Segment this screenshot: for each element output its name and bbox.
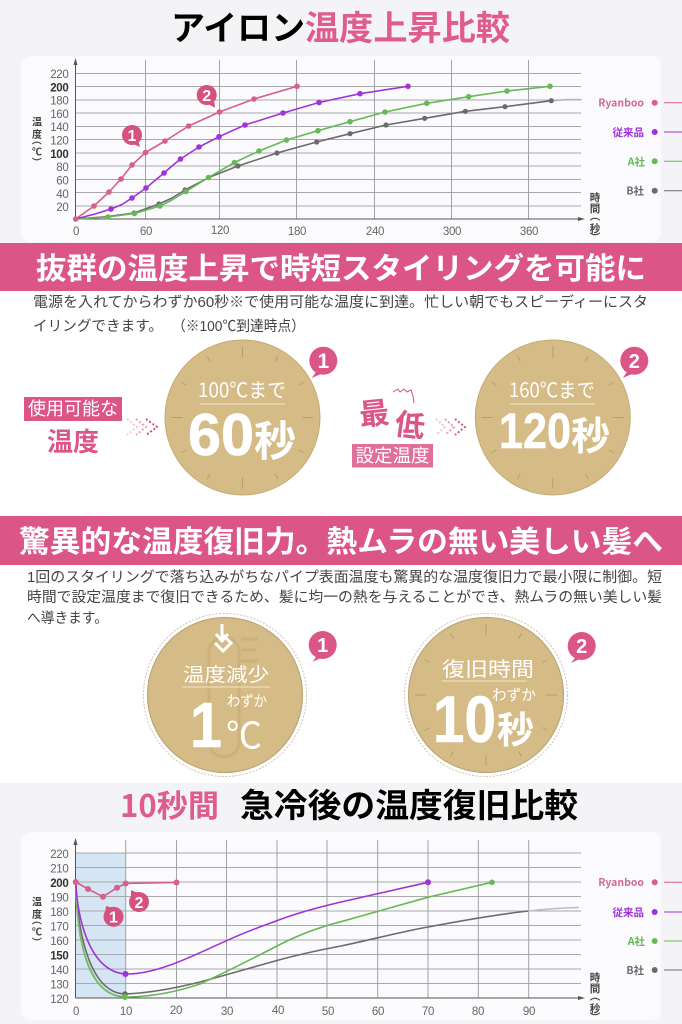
x axis title: 時 [590,191,601,204]
y axis labels: 40 [56,189,68,201]
curve: A company [76,880,495,1000]
clock: 160 degrees in 120 seconds: 秒 [571,406,610,462]
panel: recovery chart [21,832,682,1022]
line: A company [76,84,553,220]
x axis labels: 10 [120,1006,132,1018]
title: iron temperature rise comparison: 温度上昇比較 [305,1,510,50]
clock: 100 degrees in 60 seconds: 60 [188,402,254,468]
y axis labels: 200 [50,878,68,890]
arrow: dotted chevrons two [436,419,465,435]
y axis labels: 170 [50,922,68,934]
x axis labels: 90 [523,1006,535,1018]
spark lines [393,389,414,403]
x axis labels: 60 [140,226,152,238]
badge one: 1 [317,350,329,373]
label: usable temperature [24,395,122,459]
x axis labels: 80 [472,1006,484,1018]
label: usable temperature: 使用可能な [28,395,118,421]
y axis title: 温 [32,896,42,908]
chart grid [74,838,585,1000]
badge three: 1 [317,635,328,657]
chart grid [74,58,585,221]
text block: intro one: イリングできます。 [33,318,163,335]
y axis labels: 190 [50,892,68,904]
legend: Ryanboo [598,875,644,890]
x axis labels: 120 [211,225,229,237]
line: conventional product [76,84,411,219]
y axis title: （ [30,135,42,145]
curve: conventional product [76,879,431,977]
label: lowest set temperature: 最 [357,388,391,435]
banner: outstanding temperature rise: 抜群の温度上昇で時短スタイリングを可能に [36,244,646,288]
thermometer watermark [209,637,258,757]
marker 1: 1 [128,128,137,145]
y axis labels: 120 [50,136,68,148]
highlighted ten seconds [76,853,126,998]
clock: 160 degrees in 120 seconds [475,340,630,495]
label: lowest set temperature: 設定温度 [356,442,430,468]
y axis labels: 160 [50,109,68,121]
x axis title: （ [588,211,601,222]
marker 1: 1 [109,910,118,926]
dial: recovery time 10 seconds [404,614,568,776]
y axis title [30,896,42,947]
y axis title: 温 [32,116,42,128]
line: Ryanboo [73,84,300,222]
y axis labels: 220 [50,69,68,81]
marker 2 [129,890,149,912]
marker 1 [122,125,142,147]
marker 1 [104,906,124,927]
legend: Ryanboo [598,96,644,110]
clock: 100 degrees in 60 seconds: 100℃まで [198,374,286,403]
x axis title: （ [588,991,601,1002]
y axis labels: 180 [50,907,68,919]
y axis labels: 210 [50,864,68,876]
y axis labels: 220 [50,849,68,861]
y axis labels [50,69,68,214]
arrow: dotted chevrons one [127,419,157,435]
badge three [309,631,337,662]
dial: temperature drop 1 degree [1,0,306,776]
x axis title [588,191,601,242]
text block: intro one [33,293,648,335]
legend: A社 [627,154,645,169]
x axis title: 秒 [590,222,601,235]
y axis labels: 80 [56,162,68,174]
x axis labels [73,1005,535,1018]
label: lowest set temperature: 低 [392,399,428,447]
y axis labels: 60 [56,176,68,188]
x axis labels: 360 [520,226,538,238]
title: iron temperature rise comparison [171,1,510,50]
dial: recovery time 10 seconds: 秒 [497,700,534,754]
marker 2: 2 [135,895,144,912]
x axis labels: 60 [372,1006,384,1018]
y axis labels: 130 [50,980,68,992]
legend: B社 [626,184,644,198]
text block: intro two: 1回のスタイリングで落ち込みがちなパイプ表面温度も驚異的な温度復旧力で最小限に制御。短 [27,569,662,586]
badge one [309,347,337,378]
x axis labels: 50 [322,1006,334,1018]
dial: recovery time 10 seconds: 復旧時間 [442,653,534,682]
y axis title [30,116,42,167]
y axis title: ） [30,157,42,167]
marker 2: 2 [202,88,211,105]
text block: intro two: 時間で設定温度まで復旧できるため、髪に均一の熱を与えることができ、熱ムラの無い美しい髪 [27,589,662,606]
down arrow icon [215,624,231,651]
x axis labels: 180 [288,226,306,238]
text block: intro two [27,569,662,627]
title: iron temperature rise comparison: アイロン [171,1,305,50]
x axis labels [73,225,538,238]
y axis labels: 140 [50,122,68,134]
x axis labels: 240 [366,226,384,238]
y axis labels: 140 [50,965,68,977]
legend: 従来品 [612,905,644,920]
y axis title: ℃ [32,928,42,938]
y axis title: ） [30,937,42,947]
badge two: 2 [629,351,640,373]
clock: 160 degrees in 120 seconds: 120 [499,403,571,459]
x axis labels: 20 [170,1005,182,1017]
banner: recovery power: 驚異的な温度復旧力。熱ムラの無い美しい髪へ [19,517,663,561]
x axis labels: 70 [422,1006,434,1018]
legend: B社 [626,963,644,978]
y axis title: 度 [32,908,42,921]
x axis title: 時 [590,971,601,984]
y axis title: ℃ [32,148,42,158]
x axis title: ） [588,232,601,242]
x axis title [588,971,601,1022]
dial: recovery time 10 seconds: 10 [433,682,496,756]
text block: intro one: （※100℃到達時点） [172,318,305,335]
dial: temperature drop 1 degree: ℃ [226,707,262,759]
panel: temperature rise chart [21,56,682,242]
marker 2 [197,85,217,108]
legend [598,875,682,978]
x axis title: 間 [590,983,600,995]
legend [598,96,682,198]
title: recovery comparison: 10秒間 [120,781,219,826]
clock: 160 degrees in 120 seconds: 160℃まで [509,374,595,403]
label: lowest set temperature [352,388,433,468]
title: recovery comparison: 急冷後の温度復旧比較 [240,779,578,827]
y axis title: 度 [32,128,42,141]
x axis title: 秒 [590,1002,601,1015]
x axis labels: 40 [272,1005,284,1017]
x axis labels: 300 [443,226,461,238]
y axis labels: 120 [50,994,68,1006]
y axis labels: 180 [50,96,68,108]
x axis title: ） [588,1012,601,1022]
x axis labels: 0 [73,1006,79,1018]
clock: 100 degrees in 60 seconds [165,340,320,495]
x axis labels: 0 [73,226,79,238]
curve: Ryanboo [73,879,180,900]
dial: temperature drop 1 degree: わずか [227,690,267,711]
line: B company [76,98,581,219]
label: usable temperature: 温度 [47,422,99,459]
y axis labels: 200 [50,82,68,94]
y axis labels: 100 [50,149,68,161]
y axis labels [50,849,68,1006]
text block: intro one: 電源を入れてからわずか60秒※で使用可能な温度に到達。忙しい朝でもスピーディーにスタ [33,293,648,311]
y axis labels: 150 [50,950,68,962]
curve: B company [76,882,578,997]
badge four [568,632,596,663]
y axis labels: 20 [56,202,68,214]
legend: A社 [627,934,645,949]
badge four: 2 [576,636,587,658]
clock: 100 degrees in 60 seconds: 秒 [254,408,296,469]
badge two [620,347,648,378]
x axis labels: 30 [221,1006,233,1018]
x axis title: 間 [590,203,600,215]
dial: recovery time 10 seconds: わずか [492,684,536,705]
dial: temperature drop 1 degree: 1 [190,689,222,761]
legend: 従来品 [612,125,644,140]
text block: intro two: へ導きます。 [27,610,108,627]
y axis labels: 160 [50,936,68,948]
dial: temperature drop 1 degree: 温度減少 [183,660,269,687]
y axis title: （ [30,915,42,925]
